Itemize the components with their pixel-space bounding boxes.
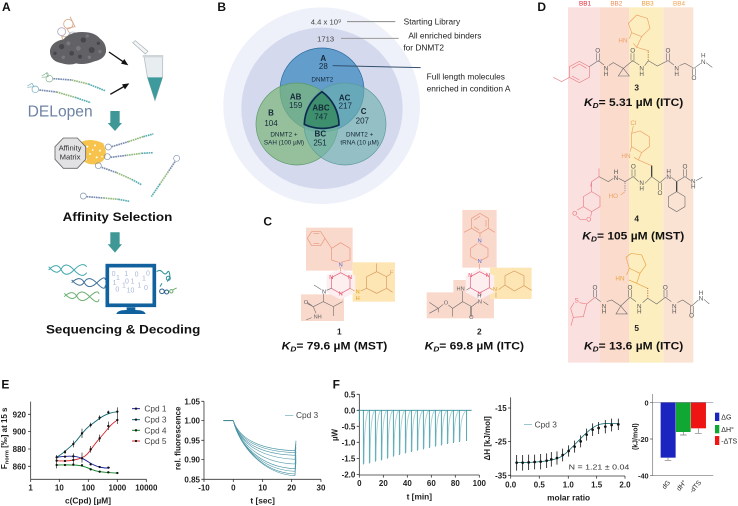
compound 1 structure: H bbox=[356, 296, 360, 302]
legend: Cpd 3 bbox=[524, 419, 557, 429]
legend: Cpd 3 bbox=[285, 410, 319, 420]
compound 3 structure: H bbox=[639, 71, 644, 78]
annotations: enriched in condition A bbox=[427, 83, 511, 93]
icon: computer with binary: 1 bbox=[124, 271, 128, 278]
chart: thermodynamic bars: -dTS bbox=[689, 479, 704, 495]
compound 4 structure: N bbox=[666, 174, 671, 181]
compound 1 structure: N bbox=[322, 290, 326, 296]
icon: computer with binary: 1 bbox=[137, 282, 141, 289]
chart: MST traces: rel. fluorescence bbox=[173, 406, 182, 470]
icon: DEL strands bbox=[27, 72, 105, 103]
compound 5 structure: HN bbox=[615, 276, 625, 283]
chart: ITC thermogram: 20 bbox=[379, 479, 388, 488]
venn labels: 747 bbox=[314, 113, 328, 122]
chart: ITC thermogram: µW bbox=[330, 428, 339, 441]
chart: ITC thermogram: 0.5 bbox=[344, 390, 356, 399]
compound 5 structure: O bbox=[663, 284, 668, 291]
chart: MST dose-response bbox=[0, 402, 158, 506]
heading: A: A bbox=[2, 0, 11, 14]
compound 4 structure: O bbox=[586, 216, 591, 223]
compound 5 structure: H bbox=[699, 290, 704, 297]
chart: MST traces bbox=[173, 397, 326, 506]
legend: thermodynamic terms: -ΔTS bbox=[721, 438, 738, 445]
icon: reaction tube bbox=[133, 41, 163, 101]
compound 2 caption: 2 bbox=[477, 326, 482, 336]
chart: MST dose-response: 920 bbox=[13, 410, 27, 419]
icon: affinity matrix: Matrix bbox=[60, 152, 81, 161]
compound 4 structure: H bbox=[614, 169, 619, 176]
compound 5 structure: O bbox=[628, 284, 633, 291]
legend: MST compounds bbox=[132, 404, 167, 446]
compound 3 caption bbox=[584, 83, 684, 110]
legend: MST compounds: Cpd 3 bbox=[144, 415, 167, 425]
legend: MST compounds: Cpd 1 bbox=[144, 404, 167, 414]
chart: ITC thermogram: -1.5 bbox=[342, 455, 356, 464]
legend: Cpd 3: Cpd 3 bbox=[296, 410, 319, 420]
arrow: library to tube bbox=[110, 83, 129, 94]
compound 4 structure bbox=[572, 120, 702, 223]
compound 3 structure: H bbox=[701, 52, 706, 59]
chart: thermodynamic bars bbox=[633, 394, 713, 495]
legend: thermodynamic terms bbox=[715, 413, 738, 445]
chart: MST traces: 10 bbox=[258, 483, 268, 492]
compound 2 structure: N bbox=[486, 273, 490, 279]
compound 2 caption bbox=[425, 326, 524, 354]
icon: computer with binary: 10 bbox=[127, 288, 135, 295]
venn labels: 159 bbox=[289, 101, 303, 110]
venn labels: DNMT2 bbox=[311, 77, 334, 84]
BB labels: BB1 bbox=[579, 1, 591, 8]
venn labels: tRNA (10 µM) bbox=[340, 140, 379, 147]
chart: thermodynamic bars: -20 bbox=[638, 435, 649, 444]
compound 1 caption: = 79.6 µM (MST) bbox=[296, 341, 388, 353]
compound 2 structure: N bbox=[478, 292, 482, 298]
panel: B Venn diagram bbox=[217, 0, 511, 204]
compound 4 caption bbox=[582, 213, 685, 243]
compound 3 structure: N bbox=[674, 66, 679, 73]
compound 4 caption: = 105 µM (MST) bbox=[597, 230, 685, 242]
chart: ITC thermogram bbox=[330, 390, 487, 502]
compound 5 structure: H bbox=[672, 308, 677, 315]
chart: MST dose-response: 860 bbox=[13, 462, 27, 471]
compound 1 structure: N bbox=[339, 262, 343, 268]
compound 4 caption: D bbox=[591, 234, 598, 243]
compound 1 caption: D bbox=[290, 345, 297, 354]
compound 2 structure: HN bbox=[457, 286, 465, 292]
chart: MST traces: 0 bbox=[231, 483, 236, 492]
compound 2 structure: N bbox=[478, 238, 482, 244]
compound 4 structure: O bbox=[572, 210, 577, 217]
panel: A DELopen workflow bbox=[2, 0, 200, 337]
compound 4 structure: H bbox=[639, 186, 644, 193]
legend: thermodynamic terms: ΔH° bbox=[721, 426, 734, 434]
heading: E: E bbox=[1, 378, 9, 392]
icon: computer with binary: 1 bbox=[113, 280, 117, 287]
annotations bbox=[403, 17, 511, 93]
compound 5 structure: S bbox=[575, 298, 579, 305]
panel: C compounds 1 and 2 bbox=[263, 210, 532, 354]
venn labels: 1713 bbox=[317, 34, 334, 43]
panel: F ITC bbox=[330, 378, 738, 503]
legend: MST compounds: Cpd 5 bbox=[144, 436, 167, 446]
annotations: Starting Library bbox=[404, 17, 461, 27]
chart: MST dose-response: [‰] at 15 s bbox=[0, 407, 9, 450]
venn labels: 104 bbox=[264, 119, 278, 128]
icon: computer with binary: 0 bbox=[115, 287, 119, 294]
compound 5 structure bbox=[571, 253, 709, 326]
compound 1 caption bbox=[282, 326, 388, 354]
icon: computer with binary: 0 bbox=[146, 270, 150, 277]
chart: ITC isotherm: -25 bbox=[495, 438, 507, 447]
chart: MST dose-response: 100 bbox=[82, 483, 96, 492]
annotation: stoichiometry: N = 1.21 ± 0.04 bbox=[569, 462, 630, 471]
legend: thermodynamic terms: ΔG bbox=[721, 414, 731, 421]
chart: MST dose-response: 900 bbox=[13, 428, 27, 437]
panel: E binding assays bbox=[0, 378, 326, 506]
venn labels: B bbox=[268, 109, 274, 118]
compound 3 caption: = 5.31 µM (ITC) bbox=[599, 97, 684, 109]
venn labels: C bbox=[361, 107, 367, 116]
chart: ITC thermogram: 60 bbox=[427, 479, 436, 488]
compound 3 structure: N bbox=[701, 59, 706, 66]
chart: MST dose-response: 10000 bbox=[135, 483, 158, 492]
chart: ITC isotherm bbox=[483, 397, 631, 503]
compound 4 structure: O bbox=[658, 190, 663, 197]
compound 1 structure: N bbox=[329, 275, 333, 281]
venn labels: 28 bbox=[319, 62, 328, 71]
compound 3 structure: H bbox=[604, 71, 609, 78]
compound 2 structure: N bbox=[468, 273, 472, 279]
legend: Cpd 3: Cpd 3 bbox=[535, 419, 557, 429]
icon: computer with binary bbox=[107, 266, 154, 314]
legend: MST compounds: Cpd 4 bbox=[144, 425, 167, 435]
compound 2 structure bbox=[429, 213, 532, 321]
compound 1 structure: F bbox=[390, 270, 394, 276]
compound 1 caption: 1 bbox=[337, 326, 342, 336]
compound 5 structure: N bbox=[637, 303, 642, 310]
venn labels: 4.4 x 10⁹ bbox=[311, 17, 341, 26]
compound 1 structure: N bbox=[348, 275, 352, 281]
icon: RNA strand on protein bbox=[58, 17, 78, 48]
compound 4 structure: H bbox=[691, 183, 696, 190]
venn labels: AC bbox=[339, 94, 351, 103]
compound 4 structure: HN bbox=[621, 153, 631, 160]
compound 2 structure: O bbox=[444, 300, 449, 306]
compound 4 structure: H bbox=[666, 168, 671, 175]
heading: B: B bbox=[217, 0, 226, 14]
heading: F: F bbox=[333, 378, 340, 392]
compound 3 structure: N bbox=[639, 66, 644, 73]
building block highlights bbox=[301, 210, 532, 321]
arrow: protein to tube bbox=[109, 52, 128, 65]
icon: computer with binary: 0 bbox=[112, 271, 116, 278]
heading: C: C bbox=[263, 215, 272, 229]
chart: ITC isotherm: ΔH [kJ/mol] bbox=[483, 416, 492, 460]
icon: DNA helices bbox=[49, 265, 105, 302]
chart: ITC thermogram: 0 bbox=[357, 479, 362, 488]
icon: computer with binary: 0 bbox=[125, 278, 129, 285]
compound 5 structure: N bbox=[602, 303, 607, 310]
chart: ITC isotherm: 0.5 bbox=[534, 481, 545, 490]
chart: ITC thermogram: 80 bbox=[451, 479, 460, 488]
chart: MST dose-response: 10 bbox=[55, 483, 64, 492]
venn labels: DNMT2 + bbox=[270, 132, 298, 139]
compound 4 caption: K bbox=[582, 230, 598, 243]
chart: ITC isotherm: molar ratio bbox=[547, 493, 590, 503]
compound 4 structure: HO bbox=[609, 193, 618, 200]
chart: MST traces: 1.05 bbox=[184, 397, 201, 406]
leader lines bbox=[333, 22, 421, 68]
compound 3 structure: O bbox=[630, 47, 635, 54]
compound 5 caption: = 13.6 µM (ITC) bbox=[599, 340, 684, 352]
icon: computer with binary: 1 bbox=[116, 275, 120, 282]
chart: MST traces: 20 bbox=[287, 483, 297, 492]
chart: ITC isotherm: 1.0 bbox=[563, 481, 574, 490]
chart: ITC isotherm: 1.5 bbox=[591, 481, 603, 490]
compound 2 structure: N bbox=[478, 300, 482, 306]
compound 4 structure: N bbox=[691, 178, 696, 185]
compound 1 structure bbox=[304, 232, 394, 320]
BB labels: BB2 bbox=[610, 1, 623, 8]
enriched binders circle bbox=[241, 28, 403, 189]
panel: D compounds 3 to 5 bbox=[537, 0, 712, 363]
chart: thermodynamic bars: dH° bbox=[675, 479, 688, 492]
venn circles bbox=[256, 48, 386, 165]
compound 2 structure: H bbox=[477, 294, 481, 300]
compound 2 structure: N bbox=[478, 259, 482, 265]
chart: ITC thermogram: -1.0 bbox=[342, 438, 356, 447]
icon: computer with binary: 0 bbox=[135, 272, 139, 279]
chart: ITC thermogram: t [min] bbox=[407, 492, 432, 502]
chart: MST dose-response: 880 bbox=[13, 445, 27, 454]
compound 1 structure: NH bbox=[314, 314, 322, 320]
chart: MST dose-response: norm bbox=[5, 450, 11, 464]
venn labels: 217 bbox=[339, 102, 353, 111]
compound 3 caption: K bbox=[584, 97, 599, 110]
venn labels: A bbox=[320, 54, 326, 63]
venn labels: ABC bbox=[312, 104, 330, 113]
compound 1 structure: N bbox=[356, 289, 360, 295]
heading: Sequencing & Decoding: Sequencing & Decoding bbox=[46, 323, 200, 337]
compound 3 structure bbox=[553, 15, 712, 83]
chart: MST traces: 1.00 bbox=[184, 417, 201, 426]
icon: bound and free strands bbox=[80, 134, 180, 201]
compound 4 structure: O bbox=[631, 163, 636, 170]
chart: ITC thermogram: -0.5 bbox=[342, 422, 356, 431]
starting library circle bbox=[223, 7, 420, 204]
compound 5 caption bbox=[584, 323, 684, 353]
compound 5 structure: H bbox=[602, 308, 607, 315]
chart: MST traces: -10 bbox=[198, 483, 210, 492]
heading: D: D bbox=[537, 0, 546, 14]
ABC intersection bbox=[304, 92, 339, 128]
compound 5 structure: O bbox=[593, 284, 598, 291]
venn labels: DNMT2 + bbox=[346, 132, 374, 139]
chart: MST traces: 0.90 bbox=[184, 456, 201, 465]
icon: computer with binary: 1 bbox=[131, 278, 135, 285]
chart: ITC thermogram: 40 bbox=[403, 479, 412, 488]
chart: ITC isotherm: 0.0 bbox=[505, 481, 517, 490]
compound 5 structure: N bbox=[699, 296, 704, 303]
compound 4 structure: N bbox=[639, 180, 644, 187]
venn labels bbox=[264, 17, 379, 147]
icon: affinity matrix bbox=[55, 138, 106, 168]
icon: computer with binary: 1 bbox=[122, 282, 126, 289]
annotations: for DNMT2 bbox=[403, 43, 444, 53]
compound 2 caption: D bbox=[433, 345, 440, 354]
icon: affinity matrix: Affinity bbox=[59, 144, 82, 153]
arrow: down 2 bbox=[108, 232, 122, 253]
chart: ITC isotherm: -15 bbox=[495, 404, 507, 413]
compound 1 caption: K bbox=[282, 341, 297, 354]
annotations: Full length molecules bbox=[427, 72, 505, 82]
chart: MST traces: t [sec] bbox=[250, 496, 275, 506]
icon: molecules bbox=[157, 270, 177, 294]
compound 2 structure: O bbox=[469, 315, 474, 321]
compound 4 structure: Cl bbox=[630, 120, 636, 127]
chart: thermodynamic bars: -40 bbox=[638, 471, 649, 480]
compound 5 caption: K bbox=[584, 340, 599, 353]
chart: MST traces: 0.95 bbox=[184, 436, 201, 445]
compound 3 caption: D bbox=[593, 101, 599, 110]
compound 3 structure: O bbox=[666, 47, 671, 54]
compound 2 caption: K bbox=[425, 341, 440, 354]
venn labels: 207 bbox=[356, 117, 370, 126]
chart: MST traces: 0.85 bbox=[184, 475, 201, 484]
compound 5 caption: 5 bbox=[634, 323, 639, 333]
annotations: All enriched binders bbox=[408, 31, 481, 41]
compound 4 structure: N bbox=[614, 175, 619, 182]
chart: thermodynamic bars: 0 bbox=[645, 398, 649, 407]
heading: Affinity Selection: Affinity Selection bbox=[63, 210, 172, 224]
venn labels: AB bbox=[290, 92, 302, 101]
chart: thermodynamic bars: dG bbox=[661, 479, 672, 491]
chart: MST traces: 30 bbox=[317, 483, 326, 492]
chart: ITC isotherm: 2.0 bbox=[619, 481, 631, 490]
BB labels: BB3 bbox=[642, 1, 654, 8]
BB column bands bbox=[568, 7, 693, 363]
compound 4 structure: O bbox=[683, 163, 688, 170]
compound 5 caption: D bbox=[593, 344, 599, 353]
venn labels: 251 bbox=[313, 138, 327, 147]
compound 5 structure: O bbox=[689, 312, 694, 319]
compound 3 structure: H bbox=[674, 71, 679, 78]
compound 3 structure: N bbox=[604, 66, 609, 73]
BB labels: BB4 bbox=[673, 1, 685, 8]
venn labels: BC bbox=[315, 129, 326, 138]
label: DELopen: DELopen bbox=[28, 104, 93, 121]
compound 2 structure: N bbox=[493, 287, 497, 293]
chart: MST dose-response: 1000 bbox=[108, 483, 127, 492]
chart: ITC thermogram: 100 bbox=[473, 479, 487, 488]
compound 4 caption: 4 bbox=[634, 213, 639, 223]
chart: ITC thermogram: 0.0 bbox=[344, 406, 356, 415]
chart: MST dose-response: F bbox=[0, 464, 9, 469]
chart: ITC thermogram: -2.0 bbox=[342, 471, 356, 480]
icon: protein surface bbox=[50, 32, 106, 65]
compound 3 structure: HN bbox=[618, 38, 628, 45]
compound 3 caption: 3 bbox=[634, 83, 639, 93]
compound 5 structure: N bbox=[672, 303, 677, 310]
chart: thermodynamic bars: (kJ/mol) bbox=[633, 423, 640, 450]
compound 1 structure: O bbox=[304, 300, 309, 306]
arrow: down 1 bbox=[108, 111, 122, 131]
compound 3 structure: O bbox=[692, 75, 697, 82]
compound 1 structure: N bbox=[339, 292, 343, 298]
icon: computer with binary: 0 bbox=[144, 285, 148, 292]
chart: MST dose-response: 1 bbox=[28, 483, 33, 492]
compound 3 structure: O bbox=[595, 47, 600, 54]
compound 5 structure: H bbox=[637, 308, 642, 315]
compound 2 caption: = 69.8 µM (ITC) bbox=[439, 341, 524, 353]
venn labels: SAH (100 µM) bbox=[264, 140, 304, 147]
BB labels bbox=[579, 1, 685, 8]
icon: computer with binary: 1 bbox=[142, 276, 146, 283]
chart: MST dose-response: c(Cpd) [µM] bbox=[65, 496, 111, 506]
chart: ITC isotherm: -35 bbox=[495, 471, 507, 480]
